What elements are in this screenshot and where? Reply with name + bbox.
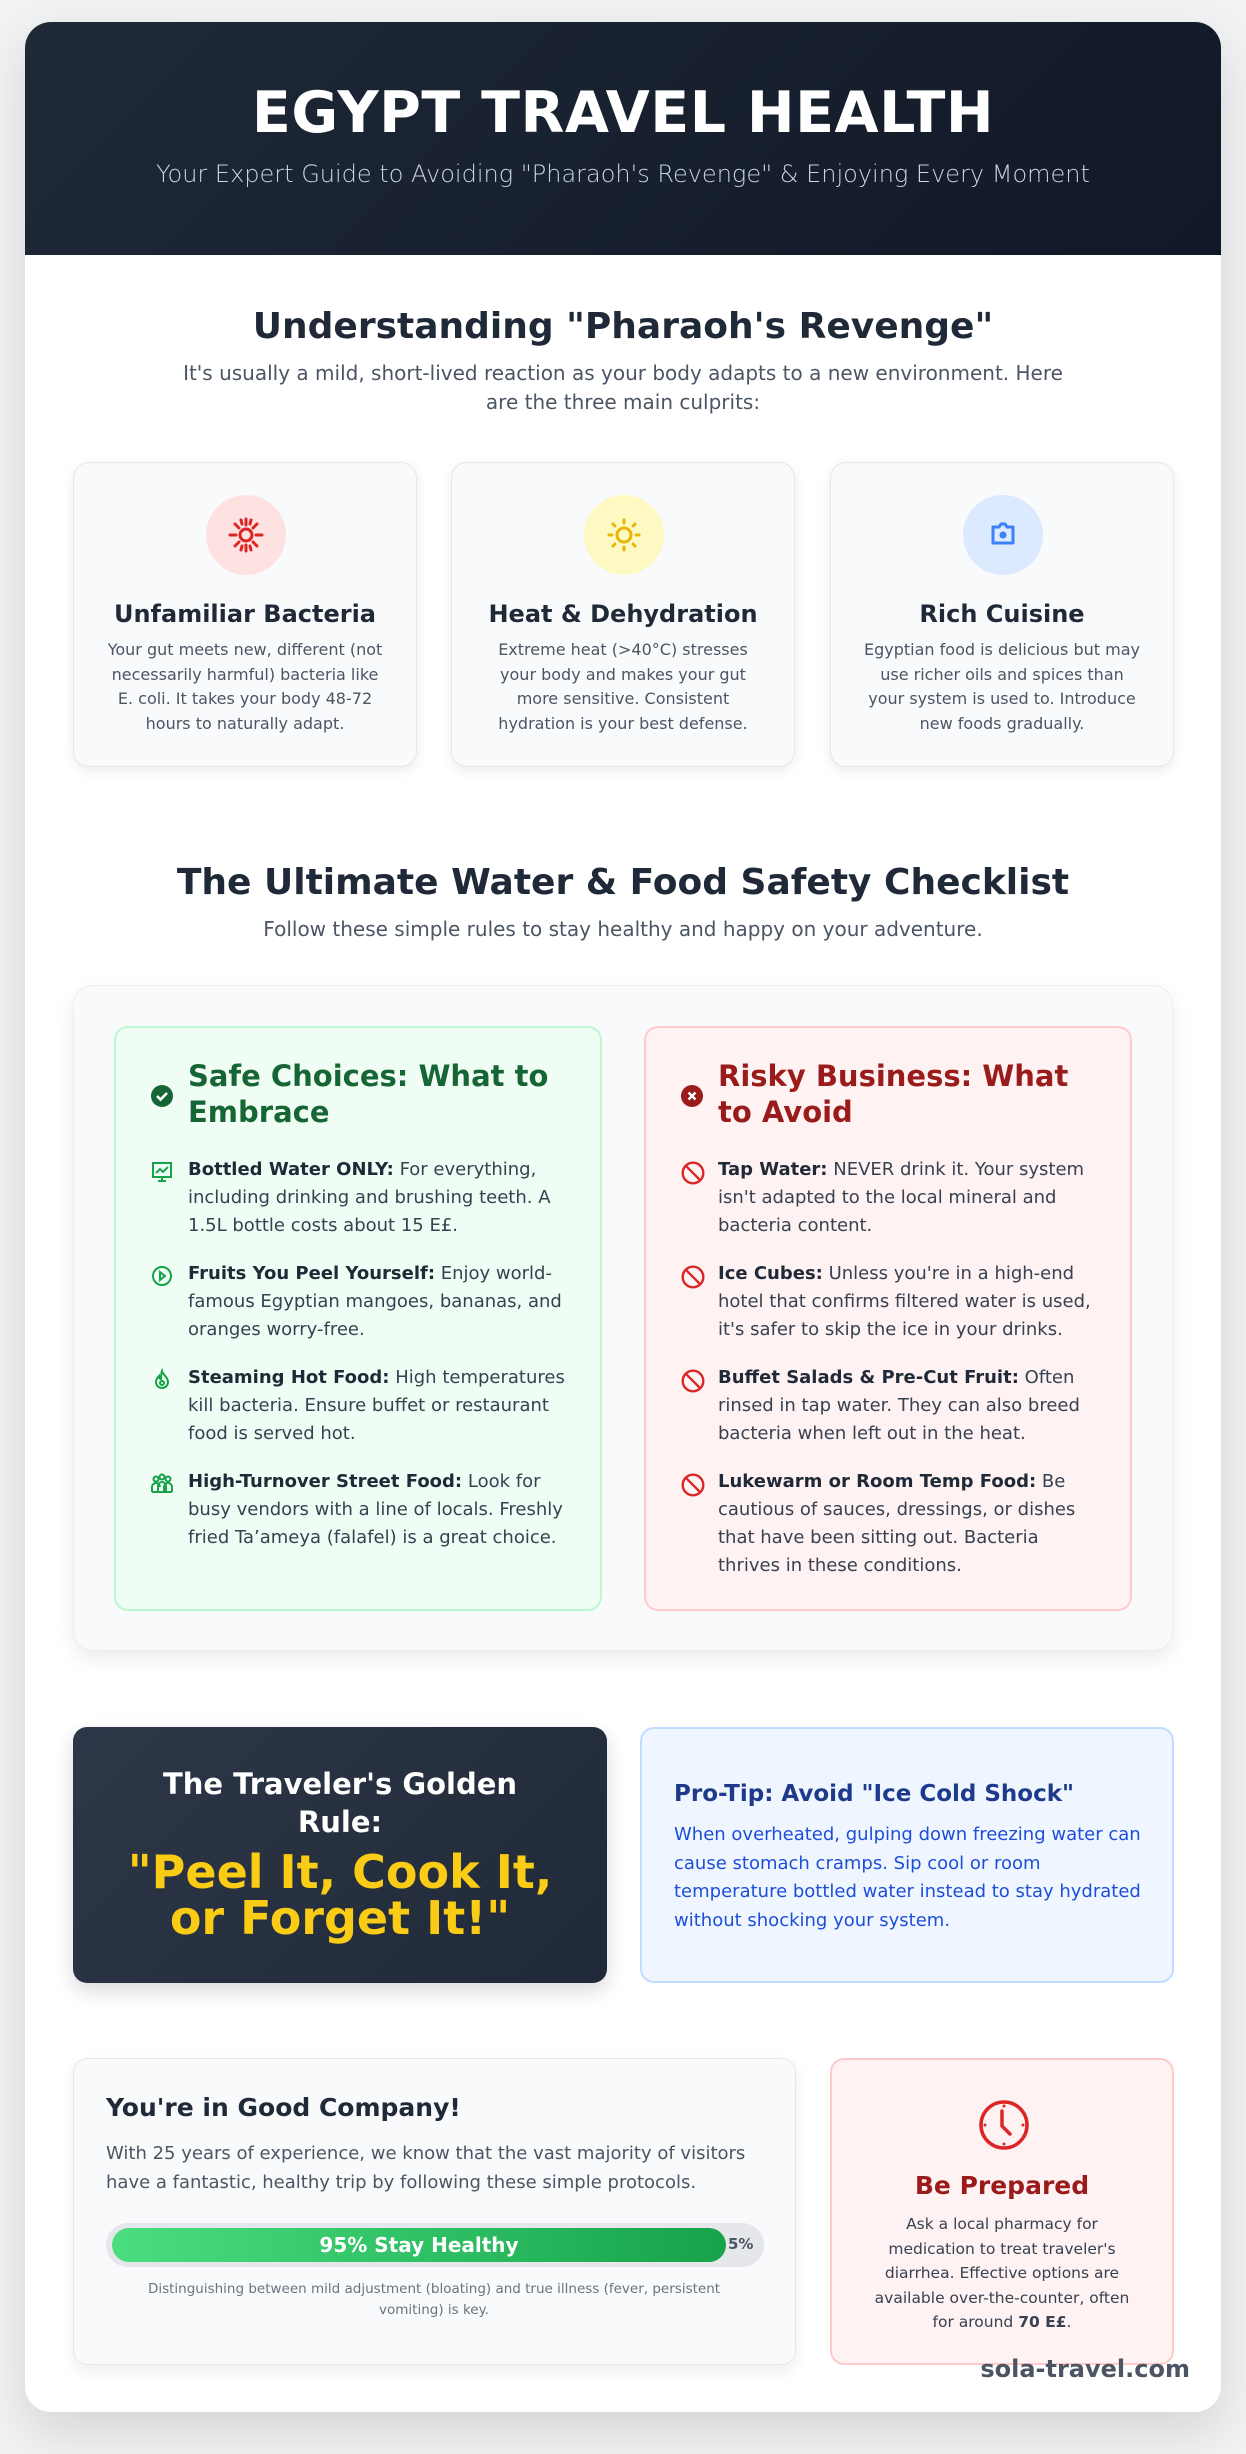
icon: sun [584, 495, 664, 575]
panel: risky business [644, 1026, 1132, 1611]
golden rule quote [128, 1845, 552, 1945]
pro-tip heading: Pro-Tip: Avoid "Ice Cold Shock" [674, 1781, 1074, 1807]
item: hot food: Steaming Hot Food: High temperatures kill bacteria. Ensure buffet or restaurant food is served hot. [188, 1367, 565, 1444]
panel: bacteria: Your gut meets new, different (not necessarily harmful) bacteria like E. coli. It takes your body 48-72 hours to naturally adapt. [108, 640, 382, 732]
panel: heat: Heat & Dehydration [488, 600, 758, 628]
panel: golden rule [73, 1727, 607, 1983]
panel: checklist container [73, 985, 1173, 1651]
panel: be prepared [830, 2058, 1174, 2365]
icon: bacteria [206, 495, 286, 575]
heading: risky: to Avoid [718, 1095, 853, 1129]
good company heading: You're in Good Company! [106, 2093, 461, 2122]
panel: heat: Extreme heat (>40°C) stresses your body and makes your gut more sensitive. Consistent hydration is your best defense. [498, 640, 748, 732]
title: EGYPT TRAVEL HEALTH [252, 80, 994, 146]
icon: food [963, 495, 1043, 575]
item: lukewarm: Lukewarm or Room Temp Food: Be cautious of sauces, dressings, or dishes that have been sitting out. Bacteria thrives in these conditions. [718, 1471, 1075, 1576]
item: tap water: Tap Water: NEVER drink it. Your system isn't adapted to the local mineral and bacteria content. [718, 1159, 1084, 1236]
heading: safe: Embrace [188, 1095, 330, 1129]
intro text: It's usually a mild, short-lived reaction as your body adapts to a new environment. Here are the three main culprits: [183, 361, 1063, 414]
panel: safe choices [114, 1026, 602, 1611]
golden rule quote: "Peel It, Cook It, [128, 1845, 552, 1899]
panel: cuisine: Egyptian food is delicious but may use richer oils and spices than your system is used to. Introduce new foods gradually. [864, 640, 1140, 732]
golden rule title: The Traveler's Golden [163, 1767, 517, 1801]
item: salads: Buffet Salads & Pre-Cut Fruit: Often rinsed in tap water. They can also breed bacteria when left out in the heat. [718, 1367, 1080, 1444]
golden rule title [163, 1767, 517, 1839]
checklist subtitle: Follow these simple rules to stay healthy and happy on your adventure. [263, 917, 983, 941]
heading: safe: Safe Choices: What to [188, 1059, 548, 1093]
panel: cuisine: Rich Cuisine [919, 600, 1085, 628]
bar chart: 95% healthy: 95% Stay Healthy [319, 2233, 519, 2257]
header [25, 22, 1221, 255]
bar chart: 95% healthy [106, 2223, 764, 2267]
be prepared text: Ask a local pharmacy for medication to treat traveler's diarrhea. Effective options are available over-the-counter, often for around 70 E£. [875, 2215, 1129, 2331]
heading: safe [151, 1059, 548, 1129]
panel: pro-tip [640, 1727, 1174, 1983]
panel: cuisine [830, 462, 1174, 767]
item: fruits: Fruits You Peel Yourself: Enjoy world-famous Egyptian mangoes, bananas, and oranges worry-free. [188, 1263, 562, 1340]
panel: heat [451, 462, 795, 767]
golden rule title: Rule: [298, 1805, 382, 1839]
panel: good company [73, 2058, 796, 2365]
item: ice cubes: Ice Cubes: Unless you're in a high-end hotel that confirms filtered water is used, it's safer to skip the ice in your drinks. [718, 1263, 1091, 1340]
golden rule quote: or Forget It!" [170, 1891, 510, 1945]
bar chart: 95% healthy: 5% [728, 2235, 753, 2253]
footer brand: sola-travel.com [980, 2355, 1190, 2383]
heading: risky: Risky Business: What [718, 1059, 1068, 1093]
section heading: checklist: The Ultimate Water & Food Safety Checklist [177, 862, 1069, 903]
subtitle: Your Expert Guide to Avoiding "Pharaoh's Revenge" & Enjoying Every Moment [156, 160, 1090, 188]
icon: clock [979, 2100, 1029, 2150]
item: street food: High-Turnover Street Food: Look for busy vendors with a line of locals. Freshly fried Ta’ameya (falafel) is a great choice. [188, 1471, 563, 1548]
pro-tip text: When overheated, gulping down freezing water can cause stomach cramps. Sip cool or room temperature bottled water instead to stay hydrated without shocking your system. [674, 1824, 1141, 1930]
panel: bacteria: Unfamiliar Bacteria [114, 600, 376, 628]
heading: risky [681, 1059, 1068, 1129]
section heading: understanding: Understanding "Pharaoh's Revenge" [253, 306, 993, 347]
note text: Distinguishing between mild adjustment (bloating) and true illness (fever, persistent vomiting) is key. [148, 2281, 720, 2318]
panel: bacteria [73, 462, 417, 767]
item: bottled water: Bottled Water ONLY: For everything, including drinking and brushing teeth. A 1.5L bottle costs about 15 E£. [188, 1159, 551, 1236]
be prepared heading: Be Prepared [915, 2171, 1089, 2200]
good company text: With 25 years of experience, we know that the vast majority of visitors have a fantastic, healthy trip by following these simple protocols. [106, 2143, 745, 2193]
